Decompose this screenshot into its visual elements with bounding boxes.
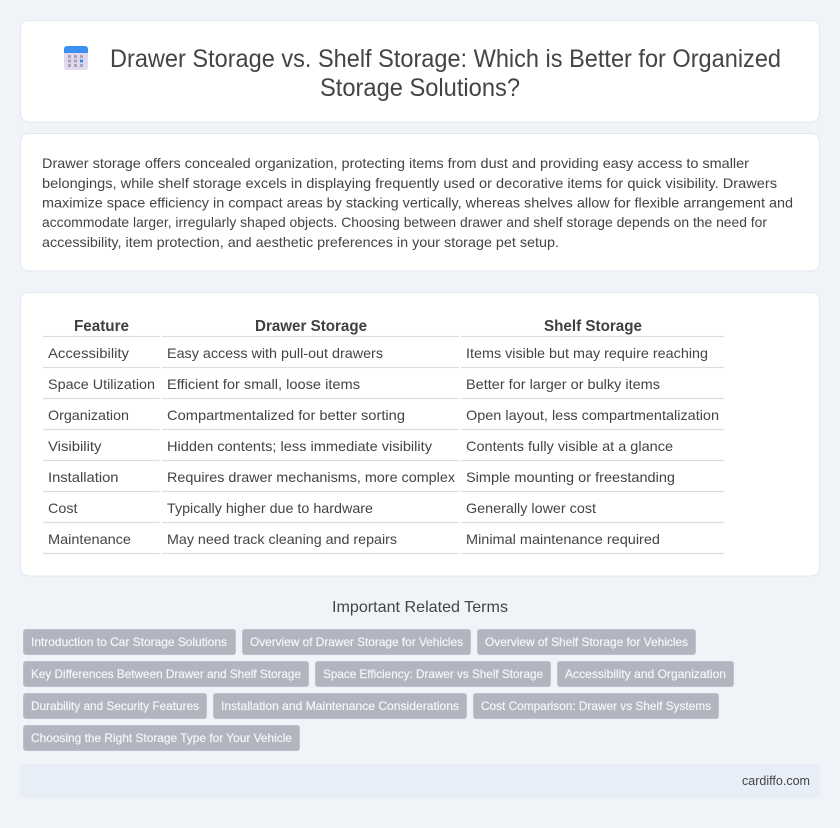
row: space utilization: Better for larger or bulky items [466, 376, 660, 392]
row: organization: Open layout, less compartmentalization [466, 407, 719, 423]
tag: Accessibility and Organization [565, 667, 726, 681]
table header: Shelf Storage [544, 318, 642, 335]
tag [316, 662, 550, 686]
tag [24, 726, 300, 750]
row: accessibility [48, 345, 708, 361]
table header [74, 318, 642, 335]
row: maintenance: Maintenance [48, 531, 131, 547]
row: space utilization: Efficient for small, loose items [167, 376, 360, 392]
tag: Introduction to Car Storage Solutions [31, 635, 227, 649]
row: organization [48, 407, 719, 423]
tag: Cost Comparison: Drawer vs Shelf Systems [481, 699, 711, 713]
panel: comparison table [20, 292, 820, 576]
row: cost: Typically higher due to hardware [167, 500, 373, 516]
tag [478, 630, 696, 654]
tag [214, 694, 466, 718]
title: Storage Solutions? [320, 74, 520, 102]
row: visibility: Contents fully visible at a glance [466, 438, 673, 454]
row: organization: Compartmentalized for better sorting [167, 407, 405, 423]
row: visibility: Hidden contents; less immediate visibility [167, 438, 432, 454]
row: maintenance [48, 531, 660, 547]
title [110, 45, 781, 102]
row: organization: Organization [48, 407, 129, 423]
table header: Drawer Storage [255, 318, 367, 335]
row: cost: Cost [48, 500, 78, 516]
row: visibility: Visibility [48, 438, 102, 454]
footer [20, 764, 820, 798]
tag: Installation and Maintenance Considerations [221, 699, 459, 713]
intro paragraph [42, 155, 793, 250]
row: visibility [48, 438, 673, 454]
intro paragraph: accessibility, item protection, and aesthetic preferences in your storage pet setup. [42, 234, 559, 250]
row: maintenance: May need track cleaning and repairs [167, 531, 397, 547]
row: space utilization [48, 376, 660, 392]
intro paragraph: accommodate larger, irregularly shaped objects. Choosing between drawer and shelf storage depends on the need for [42, 214, 767, 230]
heading: important related terms: Important Related Terms [332, 599, 508, 616]
icon: storage grid [64, 46, 88, 70]
intro paragraph: maximize space efficiency in compact areas by stacking vertically, whereas shelves allow for flexible arrangement and [42, 194, 793, 210]
tag [474, 694, 718, 718]
tag: Overview of Shelf Storage for Vehicles [485, 635, 688, 649]
tag [24, 694, 206, 718]
row: installation: Requires drawer mechanisms, more complex [167, 469, 455, 485]
row: accessibility: Accessibility [48, 345, 129, 361]
tag: Choosing the Right Storage Type for Your Vehicle [31, 731, 292, 745]
tag [558, 662, 734, 686]
intro paragraph: Drawer storage offers concealed organization, protecting items from dust and providing easy access to smaller [42, 155, 749, 171]
tag [24, 630, 236, 654]
row: maintenance: Minimal maintenance required [466, 531, 660, 547]
tag [242, 630, 470, 654]
row: cost: Generally lower cost [466, 500, 596, 516]
panel: intro text [20, 134, 820, 271]
panel: title header [20, 20, 820, 122]
tag: Space Efficiency: Drawer vs Shelf Storage [323, 667, 543, 681]
related term tags [24, 630, 734, 750]
footer: cardiffo.com [742, 773, 810, 788]
intro paragraph: belongings, while shelf storage excels in displaying frequently used or decorative items for quick visibility. Drawers [42, 175, 777, 191]
tag: Overview of Drawer Storage for Vehicles [250, 635, 463, 649]
row: accessibility: Items visible but may require reaching [466, 345, 708, 361]
row: space utilization: Space Utilization [48, 376, 155, 392]
row: cost [48, 500, 596, 516]
title: Drawer Storage vs. Shelf Storage: Which is Better for Organized [110, 45, 781, 73]
tag [24, 662, 308, 686]
row: accessibility: Easy access with pull-out drawers [167, 345, 383, 361]
table header: Feature [74, 318, 129, 335]
row: installation: Simple mounting or freestanding [466, 469, 675, 485]
row: installation [48, 469, 675, 485]
tag: Key Differences Between Drawer and Shelf Storage [31, 667, 301, 681]
row: installation: Installation [48, 469, 118, 485]
tag: Durability and Security Features [31, 699, 199, 713]
